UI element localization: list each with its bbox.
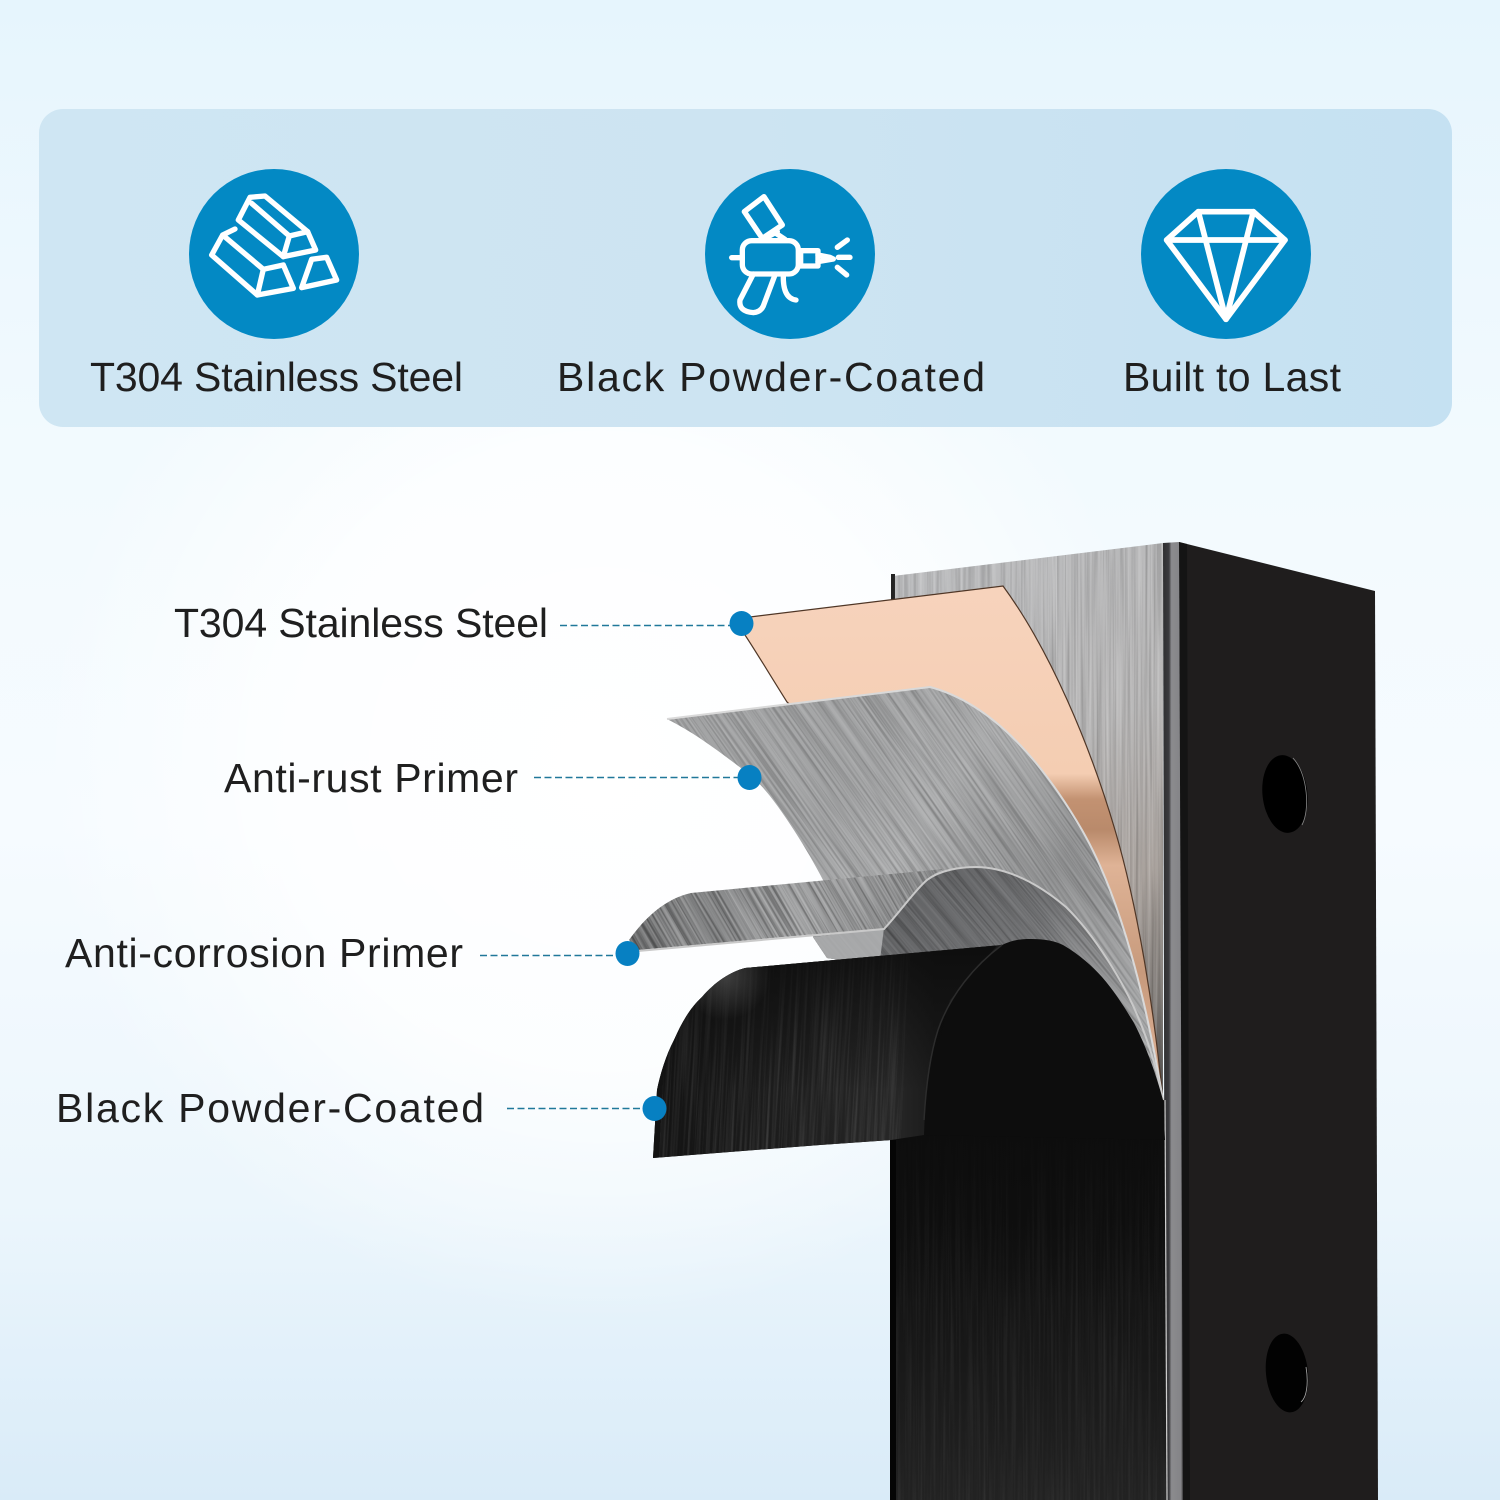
mounting hole lower [1262,1332,1312,1414]
callout: T304 Stainless Steel: T304 Stainless Steel [174,600,548,646]
post: layered cutaway [629,542,1378,1500]
feature: Built to Last [1123,169,1342,400]
icon: diamond [1141,169,1311,339]
feature: Black Powder-Coated [557,169,985,400]
mounting hole upper [1259,753,1311,835]
icon: metal ingots [189,169,359,339]
copper layer: T304 Stainless Steel sheet [745,586,1163,1100]
black strip on post [880,1100,1180,1500]
label: Black Powder-Coated: Black Powder-Coated [557,354,985,400]
callout: Anti-rust Primer [224,755,762,801]
gray layer: Anti-rust Primer sheet [667,686,1164,1100]
callout: Anti-corrosion Primer: Anti-corrosion Primer [65,930,463,976]
panel: features [39,109,1452,427]
callout: Anti-corrosion Primer [65,930,640,976]
callout: Anti-rust Primer: Anti-rust Primer [224,755,518,801]
post right black face [1179,542,1378,1500]
stainless steel core [891,543,1163,1094]
callout: Black Powder-Coated: Black Powder-Coated [56,1085,484,1131]
gray layer: Anti-corrosion Primer sheet [629,866,1164,1100]
label: T304 Stainless Steel: T304 Stainless Steel [90,354,463,400]
feature: T304 Stainless Steel [90,169,463,400]
icon: spray gun [705,169,875,339]
black layer: Black Powder-Coated sheet [653,939,1165,1158]
label: Built to Last: Built to Last [1123,354,1342,400]
post corner edge [1163,542,1183,1500]
callout: T304 Stainless Steel [174,600,754,646]
